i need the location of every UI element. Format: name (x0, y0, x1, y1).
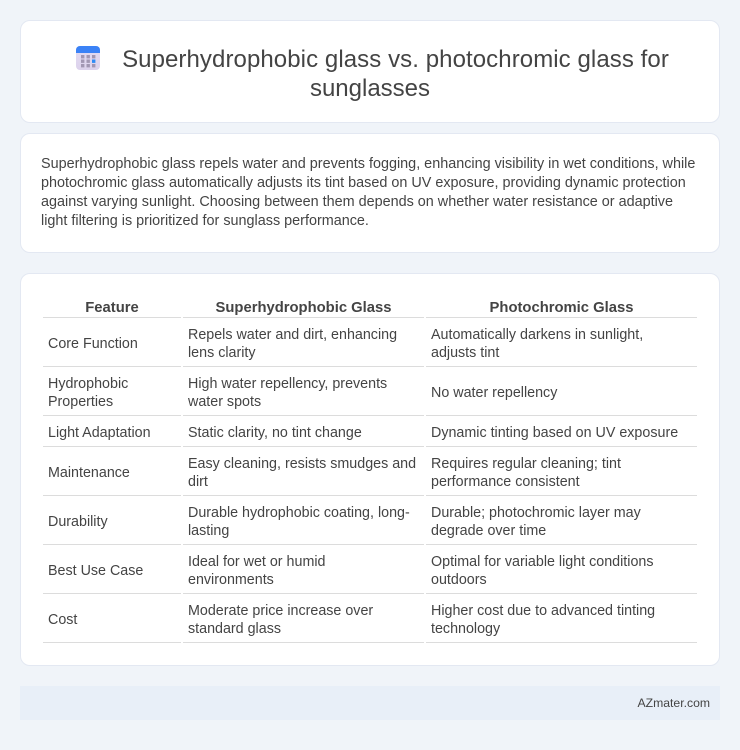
comparison table (43, 300, 697, 643)
row: best use case (48, 554, 654, 588)
table header: Feature (85, 300, 139, 316)
row: light adaptation: Dynamic tinting based on UV exposure (431, 425, 678, 441)
row: durability (48, 505, 641, 539)
row: cost: standard glass (188, 621, 281, 637)
row: maintenance: Maintenance (48, 465, 130, 481)
row: core function (48, 327, 643, 361)
row: hydrophobic properties: Hydrophobic (48, 376, 128, 392)
footer bar (20, 686, 720, 720)
row: maintenance: Easy cleaning, resists smudges and (188, 456, 416, 472)
row: core function: Automatically darkens in sunlight, (431, 327, 643, 343)
row: hydrophobic properties: Properties (48, 394, 113, 410)
text block: intro: photochromic glass automatically adjusts its tint based on UV exposure, providing dynamic protection (41, 175, 686, 191)
row: best use case: environments (188, 572, 274, 588)
row: best use case: Ideal for wet or humid (188, 554, 325, 570)
row: cost: Cost (48, 612, 77, 628)
text block: intro: against varying sunlight. Choosing between them depends on whether water resistance or adaptive (41, 194, 673, 210)
row: durability: Durable hydrophobic coating, long- (188, 505, 410, 521)
row: best use case: Best Use Case (48, 563, 143, 579)
row: durability: lasting (188, 523, 229, 539)
row: best use case: Optimal for variable light conditions (431, 554, 654, 570)
row: hydrophobic properties: High water repellency, prevents (188, 376, 387, 392)
text block: intro: light filtering is prioritized for sunglass performance. (41, 213, 369, 229)
panel: title card (20, 20, 720, 123)
title: Superhydrophobic glass vs. photochromic glass for (122, 46, 669, 73)
table header: Superhydrophobic Glass (216, 300, 391, 316)
title (122, 46, 669, 102)
row: cost: Moderate price increase over (188, 603, 373, 619)
row: durability: Durable; photochromic layer may (431, 505, 641, 521)
row: best use case: outdoors (431, 572, 487, 588)
row: cost: technology (431, 621, 500, 637)
row: cost (48, 603, 655, 637)
row: core function: Core Function (48, 336, 138, 352)
panel: intro card (20, 133, 720, 253)
text block: intro: Superhydrophobic glass repels water and prevents fogging, enhancing visibility in wet conditions, while (41, 156, 695, 172)
row: hydrophobic properties: water spots (188, 394, 261, 410)
row: hydrophobic properties (48, 376, 558, 410)
table header: Photochromic Glass (490, 300, 633, 316)
row: core function: adjusts tint (431, 345, 499, 361)
row: light adaptation: Light Adaptation (48, 425, 151, 441)
title: sunglasses (310, 75, 430, 102)
row: maintenance: dirt (188, 474, 208, 490)
row: light adaptation (48, 425, 678, 441)
table header (85, 300, 633, 316)
panel: comparison table card (20, 273, 720, 666)
row: cost: Higher cost due to advanced tinting (431, 603, 655, 619)
row: hydrophobic properties: No water repellency (431, 385, 557, 401)
row: maintenance: performance consistent (431, 474, 580, 490)
row: durability: Durability (48, 514, 108, 530)
row: core function: lens clarity (188, 345, 256, 361)
footer text: AZmater.com (638, 696, 710, 710)
row: light adaptation: Static clarity, no tint change (188, 425, 362, 441)
text block: intro (41, 156, 695, 229)
row: maintenance (48, 456, 621, 490)
icon: calendar (76, 46, 100, 70)
row: core function: Repels water and dirt, enhancing (188, 327, 397, 343)
row: durability: degrade over time (431, 523, 546, 539)
row: maintenance: Requires regular cleaning; tint (431, 456, 621, 472)
